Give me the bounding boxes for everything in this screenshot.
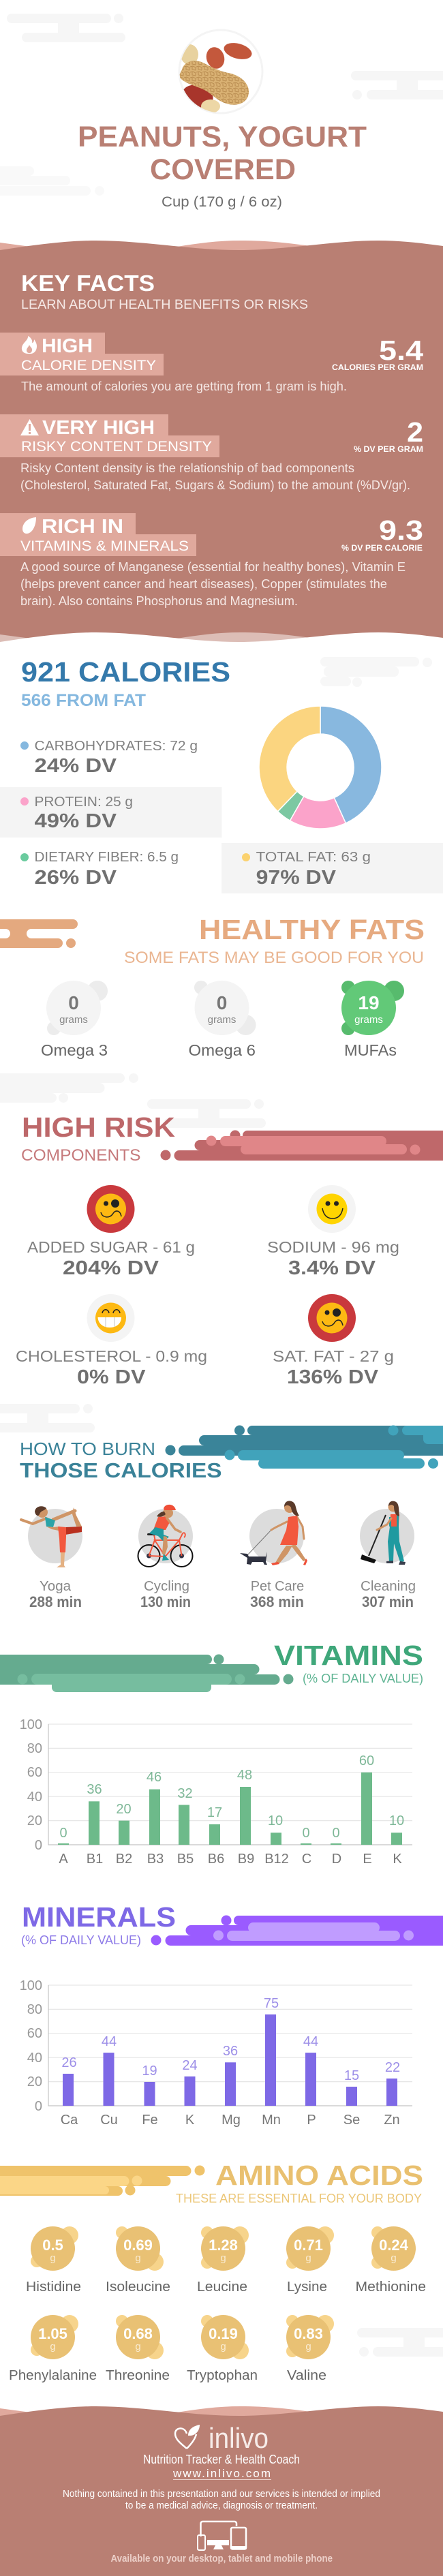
bar chart: minerals: 20 xyxy=(27,2074,42,2089)
amino: valine: g xyxy=(305,2341,311,2352)
amino: phenylalanine xyxy=(9,2315,97,2383)
bar chart: vitamins: B2 xyxy=(116,1852,132,1867)
food image: peanuts xyxy=(179,30,262,113)
amino: lysine: Lysine xyxy=(287,2280,327,2295)
heading: how to burn those calories: HOW TO BURN xyxy=(20,1439,155,1459)
tagline: Nutrition Tracker & Health Coach xyxy=(143,2453,300,2466)
bar chart: vitamins xyxy=(20,1717,412,1867)
subheading: key facts: LEARN ABOUT HEALTH BENEFITS OR RISKS xyxy=(21,297,308,312)
heading: healthy fats: HEALTHY FATS xyxy=(199,914,425,945)
legend: total fat: 97% DV xyxy=(256,867,337,889)
fact: risky content density: % DV PER GRAM xyxy=(354,444,423,454)
bar chart: vitamins: C xyxy=(302,1852,311,1867)
bar chart: vitamins: 32 xyxy=(177,1786,193,1801)
bar chart: vitamins: 17 xyxy=(207,1805,222,1820)
amino cloud xyxy=(357,2328,443,2357)
bar chart: minerals: 19 xyxy=(142,2064,157,2079)
bar chart: vitamins: D xyxy=(332,1852,341,1867)
item: cholesterol: 0% DV xyxy=(77,1366,146,1388)
bar chart: vitamins: 10 xyxy=(389,1813,404,1828)
badge: omega 6: 0 xyxy=(217,992,227,1013)
activity: cleaning: 307 min xyxy=(362,1593,414,1610)
bar chart: minerals: Se xyxy=(343,2113,360,2128)
legend: carbohydrates xyxy=(20,739,198,777)
fact: risky content density: Risky Content density is the relationship of bad components xyxy=(20,461,354,475)
amino: isoleucine: Isoleucine xyxy=(106,2280,170,2295)
amino: tryptophan: g xyxy=(220,2341,226,2352)
activity: cleaning: Cleaning xyxy=(361,1579,416,1594)
badge: omega 6: grams xyxy=(208,1014,236,1026)
bar chart: vitamins: 0 xyxy=(302,1826,310,1841)
fact: vitamins and minerals: VITAMINS & MINERALS xyxy=(20,538,189,554)
title: COVERED xyxy=(150,153,296,186)
bar chart: minerals: 44 xyxy=(102,2034,117,2049)
bar chart: vitamins: B12 xyxy=(264,1852,289,1867)
item: cholesterol: CHOLESTEROL - 0.9 mg xyxy=(16,1347,207,1365)
burn cloud xyxy=(0,1404,95,1432)
amino: threonine xyxy=(106,2315,170,2383)
activity: yoga xyxy=(21,1506,82,1610)
bar chart: vitamins: 60 xyxy=(27,1765,42,1780)
fact: vitamins and minerals: % DV PER CALORIE xyxy=(341,543,423,553)
bar chart: minerals: 0 xyxy=(35,2099,42,2114)
amino: isoleucine: g xyxy=(135,2252,141,2264)
header clouds xyxy=(0,14,443,196)
bar chart: vitamins: B5 xyxy=(177,1852,194,1867)
panel: calories xyxy=(0,656,443,893)
legend: dietary fiber: DIETARY FIBER: 6.5 g xyxy=(34,850,179,865)
activity: pet care: 368 min xyxy=(250,1593,304,1610)
amino: lysine xyxy=(286,2226,334,2295)
badge: MUFAs: MUFAs xyxy=(344,1041,397,1059)
amino: leucine: 1.28 xyxy=(209,2237,238,2254)
bar chart: minerals: 24 xyxy=(182,2058,198,2073)
amino: tryptophan: 0.19 xyxy=(209,2325,238,2342)
panel: high risk xyxy=(16,1111,443,1388)
amino: valine: 0.83 xyxy=(294,2325,323,2342)
bar chart: vitamins: 0 xyxy=(59,1826,67,1841)
amino: threonine: 0.68 xyxy=(123,2325,153,2342)
fact: risky content density: RISKY CONTENT DENSITY xyxy=(21,438,212,455)
amino: leucine: g xyxy=(220,2252,226,2264)
bar chart: minerals: Fe xyxy=(142,2113,158,2128)
bar chart: minerals: Mg xyxy=(222,2113,241,2128)
activity: cleaning xyxy=(360,1501,416,1610)
panel: how to burn xyxy=(20,1426,443,1610)
bar chart: minerals: Cu xyxy=(100,2113,118,2128)
disclaimer xyxy=(63,2488,380,2511)
bar chart: minerals xyxy=(20,1978,412,2128)
amino: phenylalanine: Phenylalanine xyxy=(9,2368,97,2383)
bar chart: vitamins: B3 xyxy=(147,1852,164,1867)
activity: yoga: 288 min xyxy=(29,1593,82,1610)
title: PEANUTS, YOGURT xyxy=(78,121,367,153)
bar chart: vitamins: 0 xyxy=(35,1838,42,1853)
amino: methionine xyxy=(356,2226,426,2295)
icon: flame xyxy=(22,336,37,354)
title xyxy=(78,121,367,186)
heading: amino acids: AMINO ACIDS xyxy=(215,2160,423,2191)
item: added sugar xyxy=(27,1185,195,1279)
amino: threonine: g xyxy=(135,2341,141,2352)
item: added sugar: ADDED SUGAR - 61 g xyxy=(27,1238,195,1256)
panel: key facts xyxy=(0,241,443,654)
amino: methionine: 0.24 xyxy=(379,2237,409,2254)
subheading: amino acids: THESE ARE ESSENTIAL FOR YOUR BODY xyxy=(176,2192,422,2205)
heading: calories: 921 CALORIES xyxy=(21,656,230,688)
panel: amino acids xyxy=(0,2160,426,2383)
legend: protein: PROTEIN: 25 g xyxy=(34,795,133,810)
amino: valine xyxy=(286,2315,334,2383)
heading: how to burn those calories: THOSE CALORIES xyxy=(20,1458,222,1482)
fact: calorie density: 5.4 xyxy=(379,335,423,366)
bar chart: minerals: 100 xyxy=(20,1978,42,1993)
badge: omega 6: Omega 6 xyxy=(188,1041,256,1059)
fact: vitamins and minerals: 9.3 xyxy=(379,515,423,546)
high risk clouds xyxy=(0,1073,266,1128)
legend: carbohydrates: CARBOHYDRATES: 72 g xyxy=(34,739,198,754)
panel: minerals xyxy=(20,1901,443,2128)
fact: calorie density: HIGH xyxy=(42,335,93,357)
badge: omega 3 xyxy=(41,981,108,1059)
bar chart: minerals: 60 xyxy=(27,2026,42,2041)
bar chart: vitamins: 10 xyxy=(268,1813,283,1828)
bar chart: vitamins: E xyxy=(363,1852,372,1867)
fact: risky content density xyxy=(0,414,423,492)
subheading: from fat: 566 FROM FAT xyxy=(21,691,146,710)
legend: carbohydrates: 24% DV xyxy=(34,755,117,777)
activity: cycling: 130 min xyxy=(140,1593,191,1610)
panel: vitamins xyxy=(0,1640,423,1867)
subheading: healthy fats: SOME FATS MAY BE GOOD FOR YOU xyxy=(124,949,424,967)
bar chart: vitamins: K xyxy=(393,1852,402,1867)
amino: methionine: Methionine xyxy=(356,2280,426,2295)
disclaimer: to be a medical advice, diagnosis or treatment. xyxy=(125,2500,318,2511)
bar chart: minerals: 44 xyxy=(303,2034,318,2049)
subheading: components: COMPONENTS xyxy=(21,1146,140,1165)
item: cholesterol xyxy=(16,1294,207,1388)
serving size: Cup (170 g / 6 oz) xyxy=(162,194,282,210)
badge: omega 3: 0 xyxy=(68,992,79,1013)
fact: vitamins and minerals xyxy=(0,513,423,608)
bar chart: vitamins: 80 xyxy=(27,1741,42,1756)
amino: leucine xyxy=(197,2226,249,2295)
icon: leaf xyxy=(22,517,36,534)
bar chart: minerals: K xyxy=(185,2113,195,2128)
website link: www.inlivo.com xyxy=(172,2467,271,2480)
amino: lysine: 0.71 xyxy=(294,2237,323,2254)
item: saturated fat: 136% DV xyxy=(287,1366,378,1388)
amino: histidine: Histidine xyxy=(26,2280,81,2295)
logo: inlivo xyxy=(175,2422,269,2454)
badge: omega 3: Omega 3 xyxy=(41,1041,108,1059)
fact: vitamins and minerals: brain). Also contains Phosphorus and Magnesium. xyxy=(20,594,298,608)
bar chart: vitamins: B9 xyxy=(238,1852,254,1867)
fact: calorie density: The amount of calories you are getting from 1 gram is high. xyxy=(21,380,347,393)
bar chart: minerals: Ca xyxy=(61,2113,78,2128)
heading: how to burn those calories xyxy=(20,1439,222,1482)
amino: tryptophan: Tryptophan xyxy=(187,2368,258,2383)
amino: isoleucine: 0.69 xyxy=(123,2237,153,2254)
item: added sugar: 204% DV xyxy=(63,1257,159,1279)
heading: high risk: HIGH RISK xyxy=(22,1111,175,1143)
heading: key facts: KEY FACTS xyxy=(21,271,155,296)
fact: risky content density: (Cholesterol, Saturated Fat, Sugars & Sodium) to the amount (%DV/gr). xyxy=(20,478,410,492)
heading: vitamins: VITAMINS xyxy=(274,1640,423,1671)
amino: tryptophan xyxy=(187,2315,258,2383)
bar chart: vitamins: 60 xyxy=(359,1753,374,1768)
amino: threonine: Threonine xyxy=(106,2368,170,2383)
amino: methionine: g xyxy=(391,2252,397,2264)
legend: dietary fiber xyxy=(20,850,179,889)
fact: calorie density xyxy=(0,333,423,393)
amino: lysine: g xyxy=(305,2252,311,2264)
amino: valine: Valine xyxy=(287,2368,326,2383)
activity: yoga: Yoga xyxy=(40,1579,72,1594)
bar chart: minerals: 40 xyxy=(27,2051,42,2066)
badge: MUFAs xyxy=(341,981,404,1059)
bar chart: minerals: 26 xyxy=(61,2055,77,2070)
bar chart: vitamins: 100 xyxy=(20,1717,42,1732)
amino: phenylalanine: g xyxy=(50,2341,56,2352)
fact: calorie density: CALORIES PER GRAM xyxy=(332,363,423,372)
fact: risky content density: VERY HIGH xyxy=(42,417,155,439)
availability note: Available on your desktop, tablet and mobile phone xyxy=(110,2553,333,2564)
bar chart: minerals: 80 xyxy=(27,2002,42,2017)
heading: minerals: MINERALS xyxy=(22,1901,176,1933)
bar chart: vitamins: B1 xyxy=(87,1852,103,1867)
bar chart: vitamins: 46 xyxy=(147,1770,162,1785)
fact: calorie density: CALORIE DENSITY xyxy=(21,357,156,373)
fact: vitamins and minerals: A good source of Manganese (essential for healthy bones), Vitamin E xyxy=(20,560,406,574)
badge: MUFAs: 19 xyxy=(358,992,380,1013)
legend: dietary fiber: 26% DV xyxy=(34,867,117,889)
amino: histidine: 0.5 xyxy=(42,2237,63,2254)
subheading: minerals: (% OF DAILY VALUE) xyxy=(21,1933,141,1947)
item: saturated fat: SAT. FAT - 27 g xyxy=(273,1347,394,1365)
bar chart: minerals: 22 xyxy=(385,2060,400,2075)
activity: cycling xyxy=(138,1505,193,1610)
activity: pet care: Pet Care xyxy=(251,1579,304,1594)
bar chart: vitamins: 40 xyxy=(27,1790,42,1805)
activity: pet care xyxy=(240,1501,307,1610)
bar chart: vitamins: 48 xyxy=(237,1768,252,1783)
item: sodium: SODIUM - 96 mg xyxy=(267,1238,399,1256)
item: saturated fat xyxy=(273,1294,394,1388)
bar chart: vitamins: B6 xyxy=(208,1852,224,1867)
panel: healthy fats xyxy=(0,914,425,1059)
legend: protein xyxy=(0,787,222,838)
donut chart xyxy=(259,706,382,829)
legend: total fat xyxy=(222,843,443,893)
bar chart: vitamins: 20 xyxy=(27,1813,42,1828)
footer xyxy=(0,2406,443,2576)
amino: isoleucine xyxy=(106,2226,170,2295)
amino: histidine: g xyxy=(50,2252,56,2264)
bar chart: vitamins: 36 xyxy=(87,1782,102,1797)
logo: inlivo: inlivo xyxy=(209,2422,269,2454)
badge: MUFAs: grams xyxy=(354,1014,383,1026)
bar chart: vitamins: A xyxy=(59,1852,68,1867)
fact: vitamins and minerals: (helps prevent cancer and heart diseases), Copper (stimulates the xyxy=(20,577,387,591)
bar chart: vitamins: 20 xyxy=(116,1802,132,1817)
subheading: vitamins: (% OF DAILY VALUE) xyxy=(303,1671,423,1685)
bar chart: vitamins: 0 xyxy=(332,1826,340,1841)
disclaimer: Nothing contained in this presentation and our services is intended or implied xyxy=(63,2488,380,2500)
badge: omega 3: grams xyxy=(59,1014,88,1026)
amino: leucine: Leucine xyxy=(197,2280,247,2295)
icon: devices xyxy=(198,2521,247,2550)
legend: protein: 49% DV xyxy=(34,810,117,832)
amino: phenylalanine: 1.05 xyxy=(38,2325,67,2342)
fact: risky content density: 2 xyxy=(407,416,423,448)
icon: warning triangle xyxy=(20,419,39,435)
activity: cycling: Cycling xyxy=(144,1579,189,1594)
legend: total fat: TOTAL FAT: 63 g xyxy=(256,850,371,865)
bar chart: minerals: Mn xyxy=(262,2113,281,2128)
amino: histidine xyxy=(26,2226,81,2295)
bar chart: minerals: P xyxy=(307,2113,316,2128)
bar chart: minerals: 36 xyxy=(223,2044,238,2059)
fact: vitamins and minerals: RICH IN xyxy=(42,516,123,538)
badge: omega 6 xyxy=(188,981,256,1059)
item: sodium xyxy=(267,1185,399,1279)
bar chart: minerals: 75 xyxy=(264,1996,279,2011)
bar chart: minerals: Zn xyxy=(384,2113,400,2128)
item: sodium: 3.4% DV xyxy=(288,1257,376,1279)
bar chart: minerals: 15 xyxy=(344,2068,359,2083)
